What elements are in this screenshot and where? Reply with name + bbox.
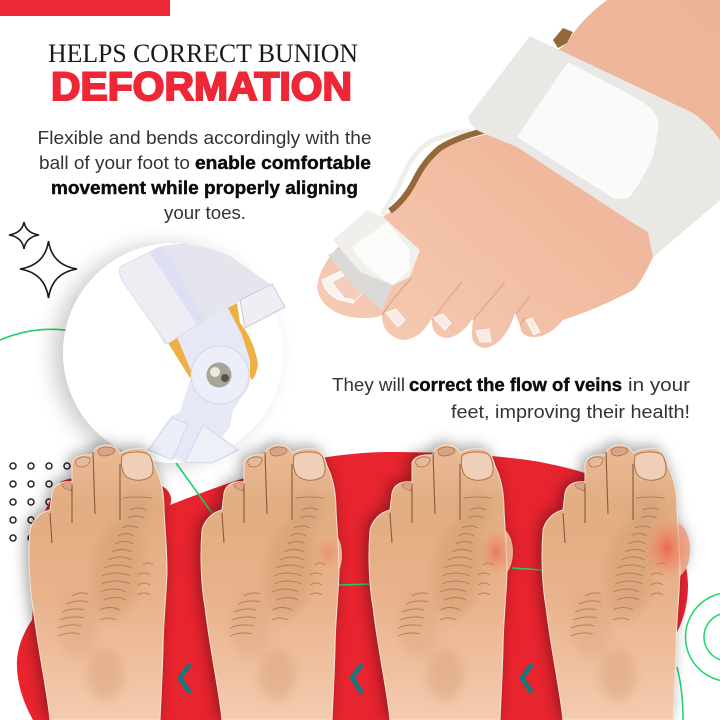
main foot photo with brace: [317, 0, 720, 348]
callout text: They will: [332, 374, 405, 395]
intro text block: your toes.: [164, 202, 246, 223]
callout text: correct the flow of veins: [409, 374, 622, 395]
arrow 2: [352, 664, 362, 693]
green lines over blob: [338, 568, 543, 585]
intro text block: movement while properly aligning: [51, 177, 358, 198]
intro text block: [38, 127, 372, 223]
arrows between feet: [180, 664, 532, 693]
hinge photo: [120, 243, 285, 463]
foot 2: mild bunion: [201, 445, 342, 720]
toe creases: [382, 278, 530, 325]
top red bar: [0, 0, 170, 16]
dot grid: [10, 463, 70, 541]
foot 1: healthy: [29, 445, 167, 720]
metal stay top: [553, 28, 573, 48]
callout text: [332, 374, 690, 422]
intro text block: ball of your foot to: [39, 152, 190, 173]
foot row: [29, 445, 690, 720]
arrow 3: [522, 664, 532, 693]
red blob background: [17, 452, 688, 720]
foot and toes: [317, 0, 720, 348]
title: HELPS CORRECT BUNION: [48, 38, 358, 68]
fabric strap: [468, 36, 720, 257]
green accent line: [0, 329, 77, 340]
green connector line: [176, 463, 212, 513]
title: [48, 38, 358, 109]
arrow 1: [180, 664, 190, 693]
callout text: in your: [628, 374, 690, 395]
title: DEFORMATION: [51, 65, 352, 109]
foot 3: moderate bunion: [369, 445, 513, 720]
intro text block: Flexible and bends accordingly with the: [38, 127, 372, 148]
zoom circle with hinge detail: [63, 243, 285, 463]
velcro patch: [517, 62, 658, 199]
callout text: feet, improving their health!: [451, 401, 690, 422]
toe wrap: [328, 246, 393, 310]
icon: sparkles: [9, 222, 77, 298]
metal stay: [390, 130, 487, 211]
foot 4: severe bunion: [542, 445, 690, 720]
plastic hinge: [382, 131, 470, 215]
intro text block: enable comfortable: [195, 152, 371, 173]
concentric green circles: [677, 592, 720, 720]
toenails: [322, 268, 540, 342]
